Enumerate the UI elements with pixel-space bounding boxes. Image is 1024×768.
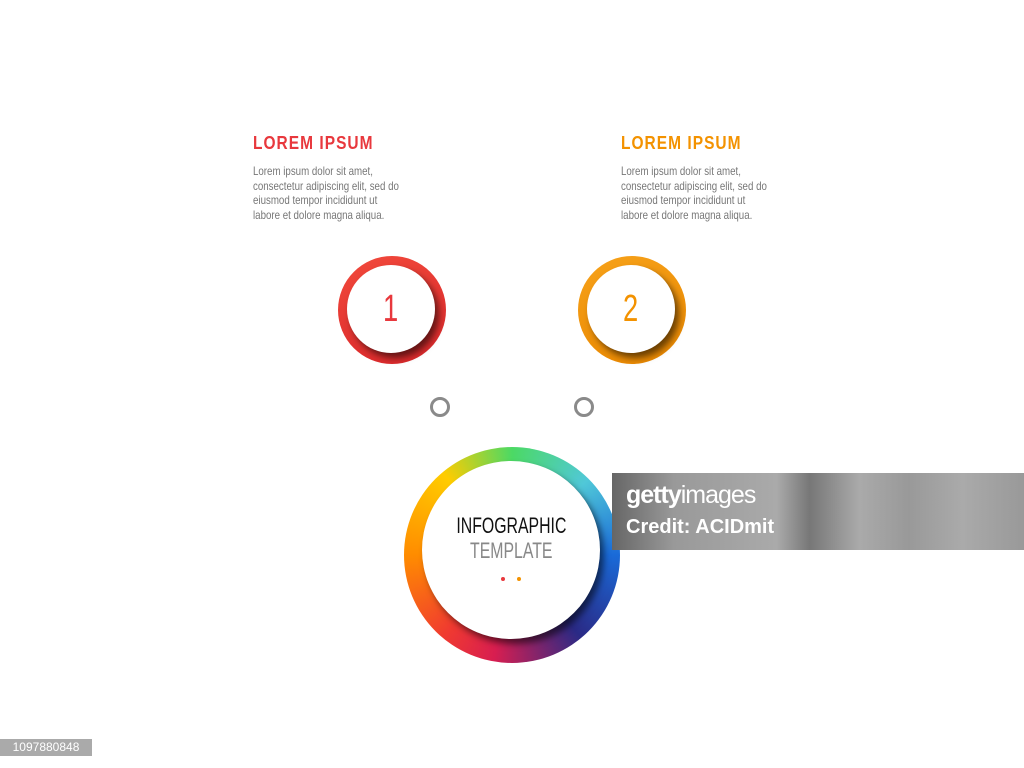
circle: step 2: 2 — [623, 288, 639, 330]
circle: step 1: 1 — [383, 288, 399, 330]
main circle: TEMPLATE — [470, 538, 552, 563]
image id — [0, 739, 92, 756]
text: step 2: Lorem ipsum dolor sit amet, — [621, 164, 741, 178]
text: step 2: eiusmod tempor incididunt ut — [621, 193, 745, 207]
watermark — [612, 473, 1024, 550]
text: step 1: labore et dolore magna aliqua. — [253, 208, 384, 222]
text: step 1: consectetur adipiscing elit, sed do — [253, 178, 399, 192]
title: INFOGRAPHIC — [456, 513, 566, 538]
text: step 1: Lorem ipsum dolor sit amet, — [253, 164, 373, 178]
circle: step 1 — [338, 256, 446, 364]
text: step 2: labore et dolore magna aliqua. — [621, 208, 752, 222]
dots — [501, 577, 521, 581]
heading: step 2: LOREM IPSUM — [621, 133, 742, 153]
watermark: gettyimages — [626, 481, 755, 509]
heading: step 1: LOREM IPSUM — [253, 133, 374, 153]
circle: step 2 — [578, 256, 686, 364]
text: step 1 — [253, 164, 399, 222]
connector dot 1 — [430, 397, 450, 417]
image id: 1097880848 — [13, 740, 79, 754]
main circle — [404, 447, 620, 663]
text: step 1: eiusmod tempor incididunt ut — [253, 193, 377, 207]
watermark: Credit: ACIDmit — [626, 516, 774, 538]
text: step 2 — [621, 164, 767, 222]
text: step 2: consectetur adipiscing elit, sed do — [621, 178, 767, 192]
connector dot 2 — [574, 397, 594, 417]
